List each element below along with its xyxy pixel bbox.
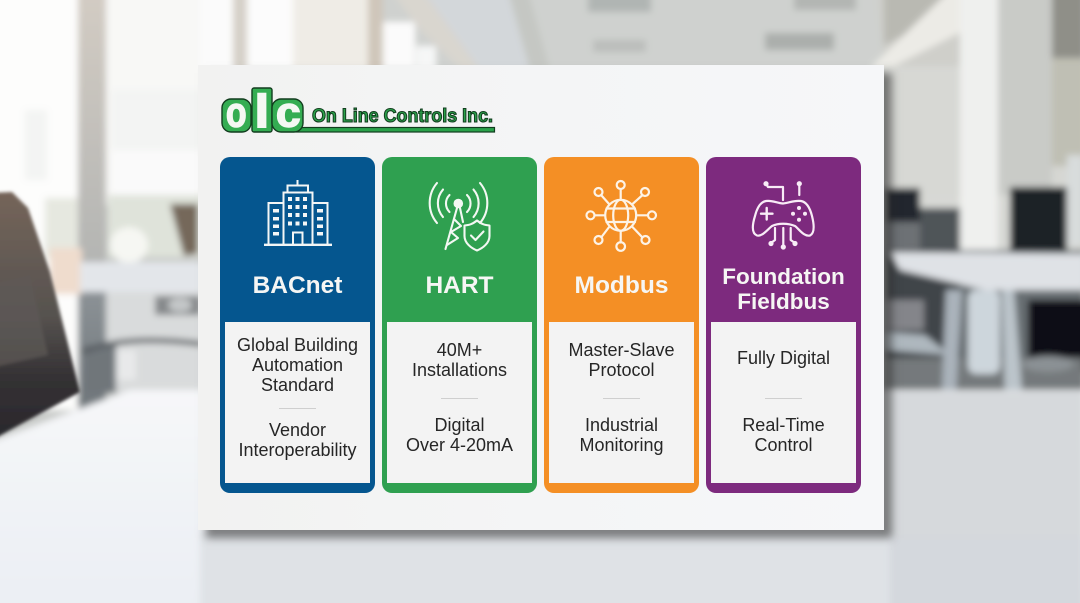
text block: HART facts bbox=[387, 322, 532, 483]
text block: BACnet facts: Interoperability bbox=[238, 440, 357, 460]
heading: Foundation Fieldbus bbox=[722, 264, 845, 314]
heading: HART: HART bbox=[425, 272, 494, 299]
text block: HART facts: Digital bbox=[434, 415, 485, 435]
panel: Modbus bbox=[544, 157, 699, 493]
text block: Modbus facts: Monitoring bbox=[579, 435, 664, 455]
icon: radio tower with shield bbox=[428, 182, 491, 252]
heading: Foundation Fieldbus: Fieldbus bbox=[737, 289, 830, 314]
heading: BACnet: BACnet bbox=[253, 272, 342, 299]
text block: Foundation Fieldbus facts: Control bbox=[754, 435, 813, 455]
panel: BACnet bbox=[220, 157, 375, 493]
panel: Foundation Fieldbus bbox=[706, 157, 861, 493]
panel: HART bbox=[382, 157, 537, 493]
text block: HART facts: Over 4-20mA bbox=[406, 435, 513, 455]
logo company name: On Line Controls Inc. bbox=[312, 106, 493, 127]
text block: BACnet facts: Vendor bbox=[269, 420, 326, 440]
text block: Foundation Fieldbus facts: Real-Time bbox=[742, 415, 825, 435]
text block: Modbus facts: Master-Slave bbox=[568, 340, 675, 360]
icon: networked globe bbox=[585, 180, 658, 252]
logo: On Line Controls Inc. bbox=[221, 85, 496, 137]
text block: BACnet facts: Global Building bbox=[237, 335, 358, 355]
text block: Foundation Fieldbus facts bbox=[711, 322, 856, 483]
icon: game controller with circuits bbox=[752, 181, 815, 250]
heading: Modbus: Modbus bbox=[575, 272, 668, 299]
heading: Foundation Fieldbus: Foundation bbox=[722, 264, 845, 289]
display board panel bbox=[198, 65, 884, 530]
logo underline bar bbox=[296, 128, 494, 132]
text block: Modbus facts: Protocol bbox=[588, 360, 655, 380]
icon: office building bbox=[264, 180, 332, 246]
text block: BACnet facts bbox=[225, 322, 370, 483]
text block: HART facts: Installations bbox=[412, 360, 507, 380]
text block: Foundation Fieldbus facts: Fully Digital bbox=[737, 348, 830, 368]
logo mark olc: c bbox=[276, 89, 301, 136]
text block: BACnet facts: Standard bbox=[261, 375, 334, 395]
text block: BACnet facts: Automation bbox=[252, 355, 343, 375]
text block: Modbus facts bbox=[549, 322, 694, 483]
logo mark olc: l bbox=[254, 85, 269, 137]
text block: Modbus facts: Industrial bbox=[585, 415, 658, 435]
logo mark olc bbox=[222, 85, 303, 137]
logo mark olc: o bbox=[226, 90, 247, 136]
text block: HART facts: 40M+ bbox=[437, 340, 482, 360]
